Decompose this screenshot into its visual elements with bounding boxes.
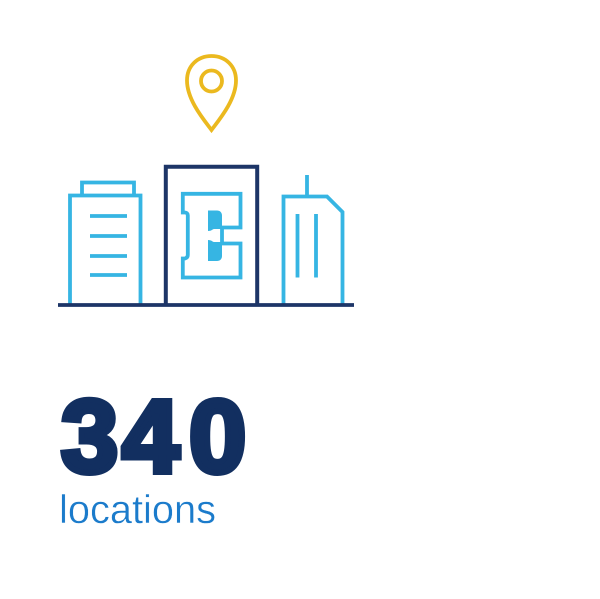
stat label: locations [59,488,216,532]
ground line [58,303,354,307]
icon: letter E logo [183,194,240,278]
icon: right building [284,175,342,305]
icon: location pin [187,56,236,130]
stat number: 340 [61,379,246,494]
icon: left building [70,182,140,305]
icon: center building [166,167,257,305]
